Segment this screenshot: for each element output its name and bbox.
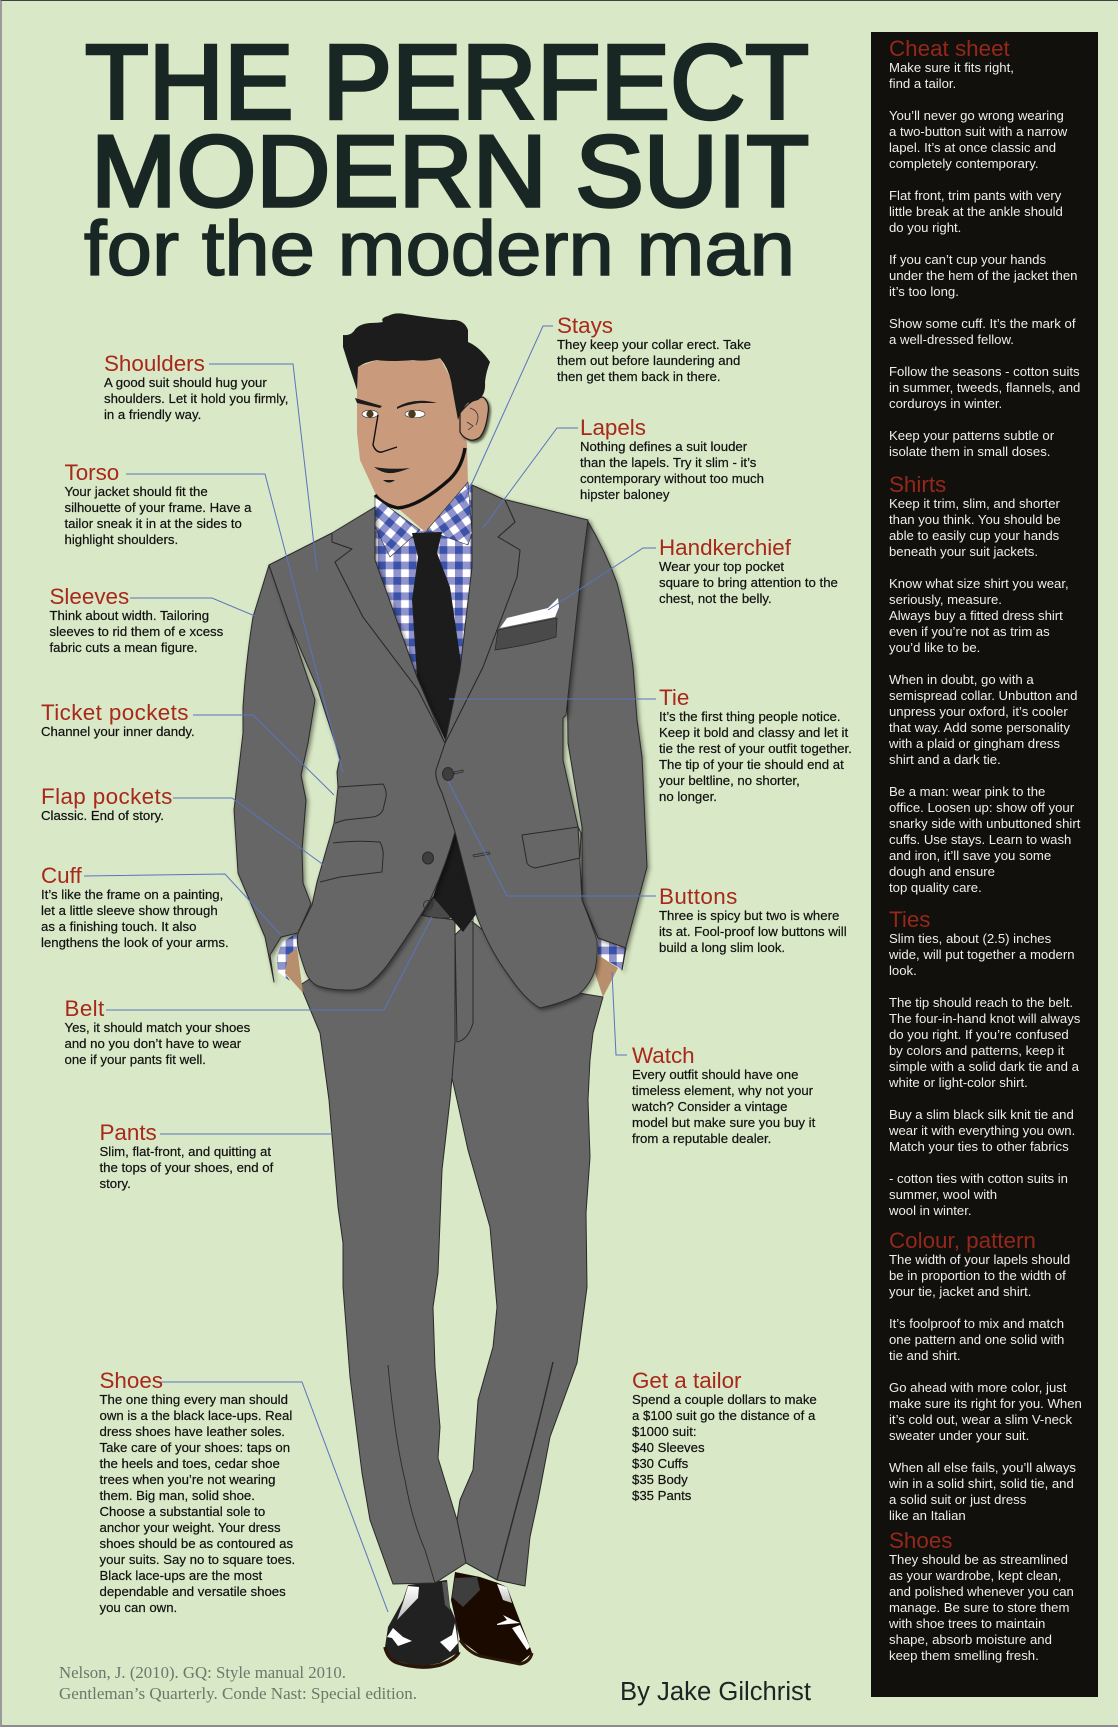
- label: get a tailor: $1000 suit:: [632, 1424, 697, 1439]
- section: shirts: snarky side with unbuttoned shirt: [889, 816, 1080, 830]
- section: cheat sheet: find a tailor.: [889, 76, 956, 91]
- label: buttons: Buttons: [659, 884, 738, 909]
- section: cheat sheet: lapel. It’s at once classic and: [889, 140, 1056, 155]
- section: cheat sheet: You’ll never go wrong wearing: [889, 108, 1064, 123]
- section: colour, pattern: sweater under your suit.: [889, 1428, 1029, 1443]
- lapels: [332, 507, 445, 743]
- section: ties: Ties: [889, 907, 930, 932]
- section: colour, pattern: When all else fails, you’ll always: [889, 1460, 1076, 1475]
- section: colour, pattern: your tie, jacket and shirt.: [889, 1284, 1031, 1299]
- hair: [343, 313, 490, 420]
- section: colour, pattern: win in a solid shirt, solid tie, and: [889, 1476, 1074, 1491]
- label: shoes: your suits. Say no to square toes.: [100, 1552, 295, 1567]
- section: ties: look.: [889, 963, 917, 978]
- shirt: [375, 482, 472, 720]
- label: shoes: Choose a substantial sole to: [100, 1504, 265, 1519]
- title: MODERN SUIT: [91, 116, 809, 228]
- section: shoes: Shoes: [889, 1528, 952, 1552]
- section: shirts: seriously, measure.: [889, 592, 1002, 606]
- section: cheat sheet: Keep your patterns subtle or: [889, 428, 1054, 443]
- label: stays: them out before laundering and: [557, 353, 740, 368]
- label: stays: then get them back in there.: [557, 369, 720, 384]
- tie tail: [433, 832, 477, 932]
- label: sleeves: fabric cuts a mean figure.: [50, 640, 198, 655]
- section: shoes: manage. Be sure to store them: [889, 1600, 1069, 1614]
- label: shoes: you can own.: [100, 1600, 177, 1615]
- illustration: man in suit: [234, 313, 647, 1667]
- section: colour, pattern: The width of your lapels should: [889, 1252, 1070, 1267]
- section: cheat sheet: Follow the seasons - cotton suits: [889, 364, 1080, 379]
- label: shoes: the heels and toes, cedar shoe: [100, 1456, 280, 1471]
- label: watch: watch? Consider a vintage: [632, 1099, 787, 1114]
- section: shirts: Be a man: wear pink to the: [889, 784, 1045, 798]
- eyebrows: [355, 398, 437, 409]
- section: colour, pattern: tie and shirt.: [889, 1348, 961, 1363]
- section: cheat sheet: do you right.: [889, 220, 961, 235]
- label: handkerchief: [659, 535, 838, 606]
- section: ties: [889, 907, 1080, 1218]
- label: buttons: [659, 884, 847, 955]
- label: pants: [100, 1120, 274, 1191]
- section: shirts: even if you’re not as trim as: [889, 624, 1050, 638]
- section: cheat sheet: [889, 36, 1080, 459]
- section: ties: Match your ties to other fabrics: [889, 1139, 1069, 1154]
- section: shirts: able to easily cup your hands: [889, 528, 1059, 542]
- label: shoes: shoes should be as contoured as: [100, 1536, 293, 1551]
- section: colour, pattern: Go ahead with more color, just: [889, 1380, 1066, 1395]
- label: cuff: as a finishing touch. It also: [41, 919, 196, 934]
- jaw line: [375, 448, 465, 508]
- section: shoes: keep them smelling fresh.: [889, 1648, 1039, 1662]
- label: pants: Slim, flat-front, and quitting at: [100, 1144, 271, 1159]
- section: cheat sheet: a two-button suit with a narrow: [889, 124, 1067, 139]
- label: shoes: Shoes: [100, 1368, 163, 1393]
- section: shirts: top quality care.: [889, 880, 982, 894]
- section: cheat sheet: If you can’t cup your hands: [889, 252, 1046, 267]
- section: shirts: than you think. You should be: [889, 512, 1061, 526]
- section: shirts: Shirts: [889, 472, 946, 496]
- label: shoes: trees when you’re not wearing: [100, 1472, 275, 1487]
- title: THE PERFECT: [85, 24, 809, 142]
- label: stays: Stays: [557, 313, 613, 338]
- section: ties: Slim ties, about (2.5) inches: [889, 931, 1051, 946]
- label: lapels: hipster baloney: [580, 486, 669, 502]
- label: get a tailor: Spend a couple dollars to make: [632, 1392, 817, 1407]
- label: watch: Every outfit should have one: [632, 1067, 798, 1082]
- label: cuff: It’s like the frame on a painting,: [41, 887, 223, 902]
- label: handkerchief: Handkerchief: [659, 535, 791, 560]
- title: [84, 24, 809, 292]
- section: shirts: Keep it trim, slim, and shorter: [889, 496, 1060, 510]
- label: tie: The tip of your tie should end at: [659, 757, 844, 772]
- label: cuff: Cuff: [41, 863, 82, 888]
- label: shoes: dress shoes have leather soles.: [100, 1424, 285, 1439]
- label: torso: Your jacket should fit the: [64, 484, 208, 499]
- label: shoulders: [104, 351, 288, 422]
- label: belt: [64, 996, 250, 1067]
- section: ties: white or light-color shirt.: [889, 1075, 1028, 1090]
- label: watch: timeless element, why not your: [632, 1083, 813, 1098]
- label: flap pockets: [41, 784, 173, 823]
- shoes: [385, 1572, 532, 1667]
- leader lines: [84, 326, 656, 1612]
- panel: cheat sheet sidebar: [871, 32, 1098, 1697]
- label: cuff: let a little sleeve show through: [41, 903, 218, 918]
- label: belt: and no you don’t have to wear: [64, 1036, 241, 1051]
- section: ties: wear it with everything you own.: [889, 1123, 1075, 1138]
- jacket body: [269, 485, 597, 1008]
- label: get a tailor: $30 Cuffs: [632, 1456, 688, 1471]
- section: cheat sheet: under the hem of the jacket then: [889, 268, 1077, 283]
- section: cheat sheet: corduroys in winter.: [889, 396, 1002, 411]
- label: sleeves: [50, 584, 223, 655]
- label: shoes: own is a the black lace-ups. Real: [100, 1408, 292, 1423]
- section: ties: The tip should reach to the belt.: [889, 995, 1073, 1010]
- section: shirts: Know what size shirt you wear,: [889, 576, 1069, 590]
- label: buttons: Three is spicy but two is where: [659, 908, 839, 923]
- label: torso: Torso: [64, 460, 119, 485]
- section: shoes: [889, 1528, 1074, 1662]
- section: colour, pattern: one pattern and one solid with: [889, 1332, 1064, 1347]
- label: lapels: than the lapels. Try it slim - it’s: [580, 454, 756, 470]
- section: shirts: When in doubt, go with a: [889, 672, 1034, 686]
- label: cuff: lengthens the look of your arms.: [41, 935, 229, 950]
- section: colour, pattern: [889, 1228, 1082, 1523]
- label: get a tailor: a $100 suit go the distance of a: [632, 1408, 815, 1423]
- citation: Gentleman’s Quarterly. Conde Nast: Special edition.: [59, 1684, 417, 1703]
- section: cheat sheet: Flat front, trim pants with very: [889, 188, 1061, 203]
- section: ties: simple with a solid dark tie and a: [889, 1059, 1079, 1074]
- label: shoes: Take care of your shoes: taps on: [100, 1440, 290, 1455]
- section: shirts: semispread collar. Unbutton and: [889, 688, 1077, 702]
- label: belt: Belt: [64, 996, 105, 1021]
- label: lapels: contemporary without too much: [580, 470, 764, 486]
- section: ties: by colors and patterns, keep it: [889, 1043, 1064, 1058]
- label: shoes: anchor your weight. Your dress: [100, 1520, 281, 1535]
- label: sleeves: Think about width. Tailoring: [50, 608, 209, 623]
- label: torso: silhouette of your frame. Have a: [64, 500, 251, 515]
- eyes: [362, 410, 425, 418]
- label: ticket pockets: Channel your inner dandy.: [41, 724, 195, 739]
- label: stays: They keep your collar erect. Take: [557, 337, 751, 352]
- label: get a tailor: $35 Body: [632, 1472, 688, 1487]
- section: colour, pattern: like an Italian: [889, 1508, 966, 1523]
- label: ticket pockets: [41, 700, 195, 739]
- section: shoes: They should be as streamlined: [889, 1552, 1068, 1566]
- section: cheat sheet: Show some cuff. It’s the mark of: [889, 316, 1075, 331]
- cuffs and hands: [277, 933, 626, 997]
- section: colour, pattern: It’s foolproof to mix and match: [889, 1316, 1064, 1331]
- section: colour, pattern: a solid suit or just dress: [889, 1492, 1026, 1507]
- pants: [300, 897, 603, 1586]
- label: shoes: them. Big man, solid shoe.: [100, 1488, 255, 1503]
- label: pants: the tops of your shoes, end of: [100, 1160, 273, 1175]
- section: ties: Buy a slim black silk knit tie and: [889, 1107, 1074, 1122]
- section: cheat sheet: completely contemporary.: [889, 156, 1038, 171]
- label: shoulders: shoulders. Let it hold you firmly,: [104, 391, 288, 406]
- label: tie: Tie: [659, 685, 689, 710]
- section: shirts: you’d like to be.: [889, 640, 980, 654]
- section: shirts: that way. Add some personality: [889, 720, 1070, 734]
- label: ticket pockets: Ticket pockets: [41, 700, 189, 725]
- section: shirts: beneath your suit jackets.: [889, 544, 1038, 558]
- section: shirts: Always buy a fitted dress shirt: [889, 608, 1063, 622]
- label: tie: It’s the first thing people notice.: [659, 709, 841, 724]
- label: flap pockets: Classic. End of story.: [41, 808, 164, 823]
- label: handkerchief: Wear your top pocket: [659, 559, 784, 574]
- label: pants: story.: [100, 1176, 131, 1191]
- belt: [422, 897, 452, 918]
- section: cheat sheet: little break at the ankle should: [889, 204, 1063, 219]
- label: belt: Yes, it should match your shoes: [64, 1020, 250, 1035]
- section: shirts: [889, 472, 1080, 894]
- label: watch: Watch: [632, 1043, 695, 1068]
- section: ties: The four-in-hand knot will always: [889, 1011, 1080, 1026]
- section: colour, pattern: make sure its right for you. When: [889, 1396, 1082, 1411]
- tie: [412, 532, 462, 740]
- label: pants: Pants: [100, 1120, 157, 1145]
- label: shoes: dependable and versatile shoes: [100, 1584, 286, 1599]
- section: shoes: shape, absorb moisture and: [889, 1632, 1052, 1646]
- label: lapels: [580, 414, 764, 502]
- pocket square: [495, 598, 559, 650]
- title: for the modern man: [84, 206, 795, 292]
- label: cuff: [41, 863, 229, 950]
- label: shoulders: A good suit should hug your: [104, 375, 267, 390]
- section: cheat sheet: in summer, tweeds, flannels, and: [889, 380, 1080, 395]
- label: torso: [64, 460, 252, 547]
- sleeves: [234, 520, 647, 982]
- label: tie: [658, 685, 852, 804]
- label: flap pockets: Flap pockets: [41, 784, 173, 809]
- section: ties: wide, will put together a modern: [889, 947, 1075, 962]
- section: shoes: as your wardrobe, kept clean,: [889, 1568, 1061, 1582]
- label: tie: your beltline, no shorter,: [659, 773, 800, 788]
- label: buttons: build a long slim look.: [659, 940, 785, 955]
- label: shoes: Black lace-ups are the most: [100, 1568, 262, 1583]
- label: get a tailor: $40 Sleeves: [632, 1440, 705, 1455]
- section: shirts: office. Loosen up: show off your: [889, 800, 1074, 814]
- ear: [460, 397, 488, 440]
- section: cheat sheet: a well-dressed fellow.: [889, 332, 1014, 347]
- label: shoulders: in a friendly way.: [104, 407, 201, 422]
- section: cheat sheet: Make sure it fits right,: [889, 60, 1014, 75]
- byline: By Jake Gilchrist: [620, 1678, 811, 1706]
- section: shoes: with shoe trees to maintain: [889, 1616, 1045, 1630]
- label: torso: highlight shoulders.: [64, 532, 178, 547]
- section: colour, pattern: it’s cold out, wear a slim V-neck: [889, 1412, 1072, 1427]
- section: ties: - cotton ties with cotton suits in: [889, 1171, 1068, 1186]
- section: ties: wool in winter.: [889, 1203, 972, 1218]
- label: torso: tailor sneak it in at the sides to: [64, 516, 242, 531]
- label: handkerchief: square to bring attention to the: [659, 575, 838, 590]
- label: buttons: its at. Fool-proof low buttons will: [659, 924, 847, 939]
- section: shirts: and iron, it’ll save you some: [889, 848, 1051, 862]
- label: watch: [632, 1043, 816, 1146]
- label: get a tailor: [632, 1368, 817, 1503]
- label: stays: [557, 313, 751, 384]
- label: watch: from a reputable dealer.: [632, 1131, 771, 1146]
- section: shoes: and polished whenever you can: [889, 1584, 1074, 1598]
- label: lapels: Lapels: [580, 414, 646, 440]
- collar: [375, 482, 472, 557]
- section: shirts: unpress your oxford, it’s cooler: [889, 704, 1068, 718]
- label: tie: no longer.: [659, 789, 717, 804]
- section: cheat sheet: isolate them in small doses.: [889, 444, 1050, 459]
- section: cheat sheet: Cheat sheet: [889, 36, 1010, 61]
- label: belt: one if your pants fit well.: [64, 1052, 206, 1067]
- section: shirts: shirt and a dark tie.: [889, 752, 1001, 766]
- section: ties: do you right. If you’re confused: [889, 1027, 1069, 1042]
- section: ties: summer, wool with: [889, 1187, 997, 1202]
- label: sleeves: sleeves to rid them of e xcess: [50, 624, 223, 639]
- section: colour, pattern: be in proportion to the width of: [889, 1268, 1066, 1283]
- label: shoulders: Shoulders: [104, 351, 205, 376]
- label: lapels: Nothing defines a suit louder: [580, 438, 747, 454]
- label: tie: Keep it bold and classy and let it: [659, 725, 848, 740]
- label: shoes: The one thing every man should: [100, 1392, 288, 1407]
- nose: [373, 415, 397, 452]
- label: shoes: [99, 1368, 295, 1615]
- label: sleeves: Sleeves: [50, 584, 129, 609]
- neck and face: [343, 313, 490, 532]
- label: get a tailor: Get a tailor: [632, 1368, 742, 1393]
- section: shirts: cuffs. Use stays. Learn to wash: [889, 832, 1071, 846]
- section: cheat sheet: it’s too long.: [889, 284, 959, 299]
- label: handkerchief: chest, not the belly.: [659, 591, 772, 606]
- mouth: [374, 467, 410, 482]
- label: get a tailor: $35 Pants: [632, 1488, 691, 1503]
- section: colour, pattern: Colour, pattern: [889, 1228, 1036, 1253]
- citation: [59, 1663, 417, 1703]
- section: shirts: dough and ensure: [889, 864, 995, 878]
- citation: Nelson, J. (2010). GQ: Style manual 2010.: [59, 1663, 346, 1682]
- pockets and buttons: [320, 768, 581, 910]
- label: tie: tie the rest of your outfit together.: [659, 741, 852, 756]
- label: watch: model but make sure you buy it: [632, 1115, 815, 1130]
- section: shirts: with a plaid or gingham dress: [889, 736, 1060, 750]
